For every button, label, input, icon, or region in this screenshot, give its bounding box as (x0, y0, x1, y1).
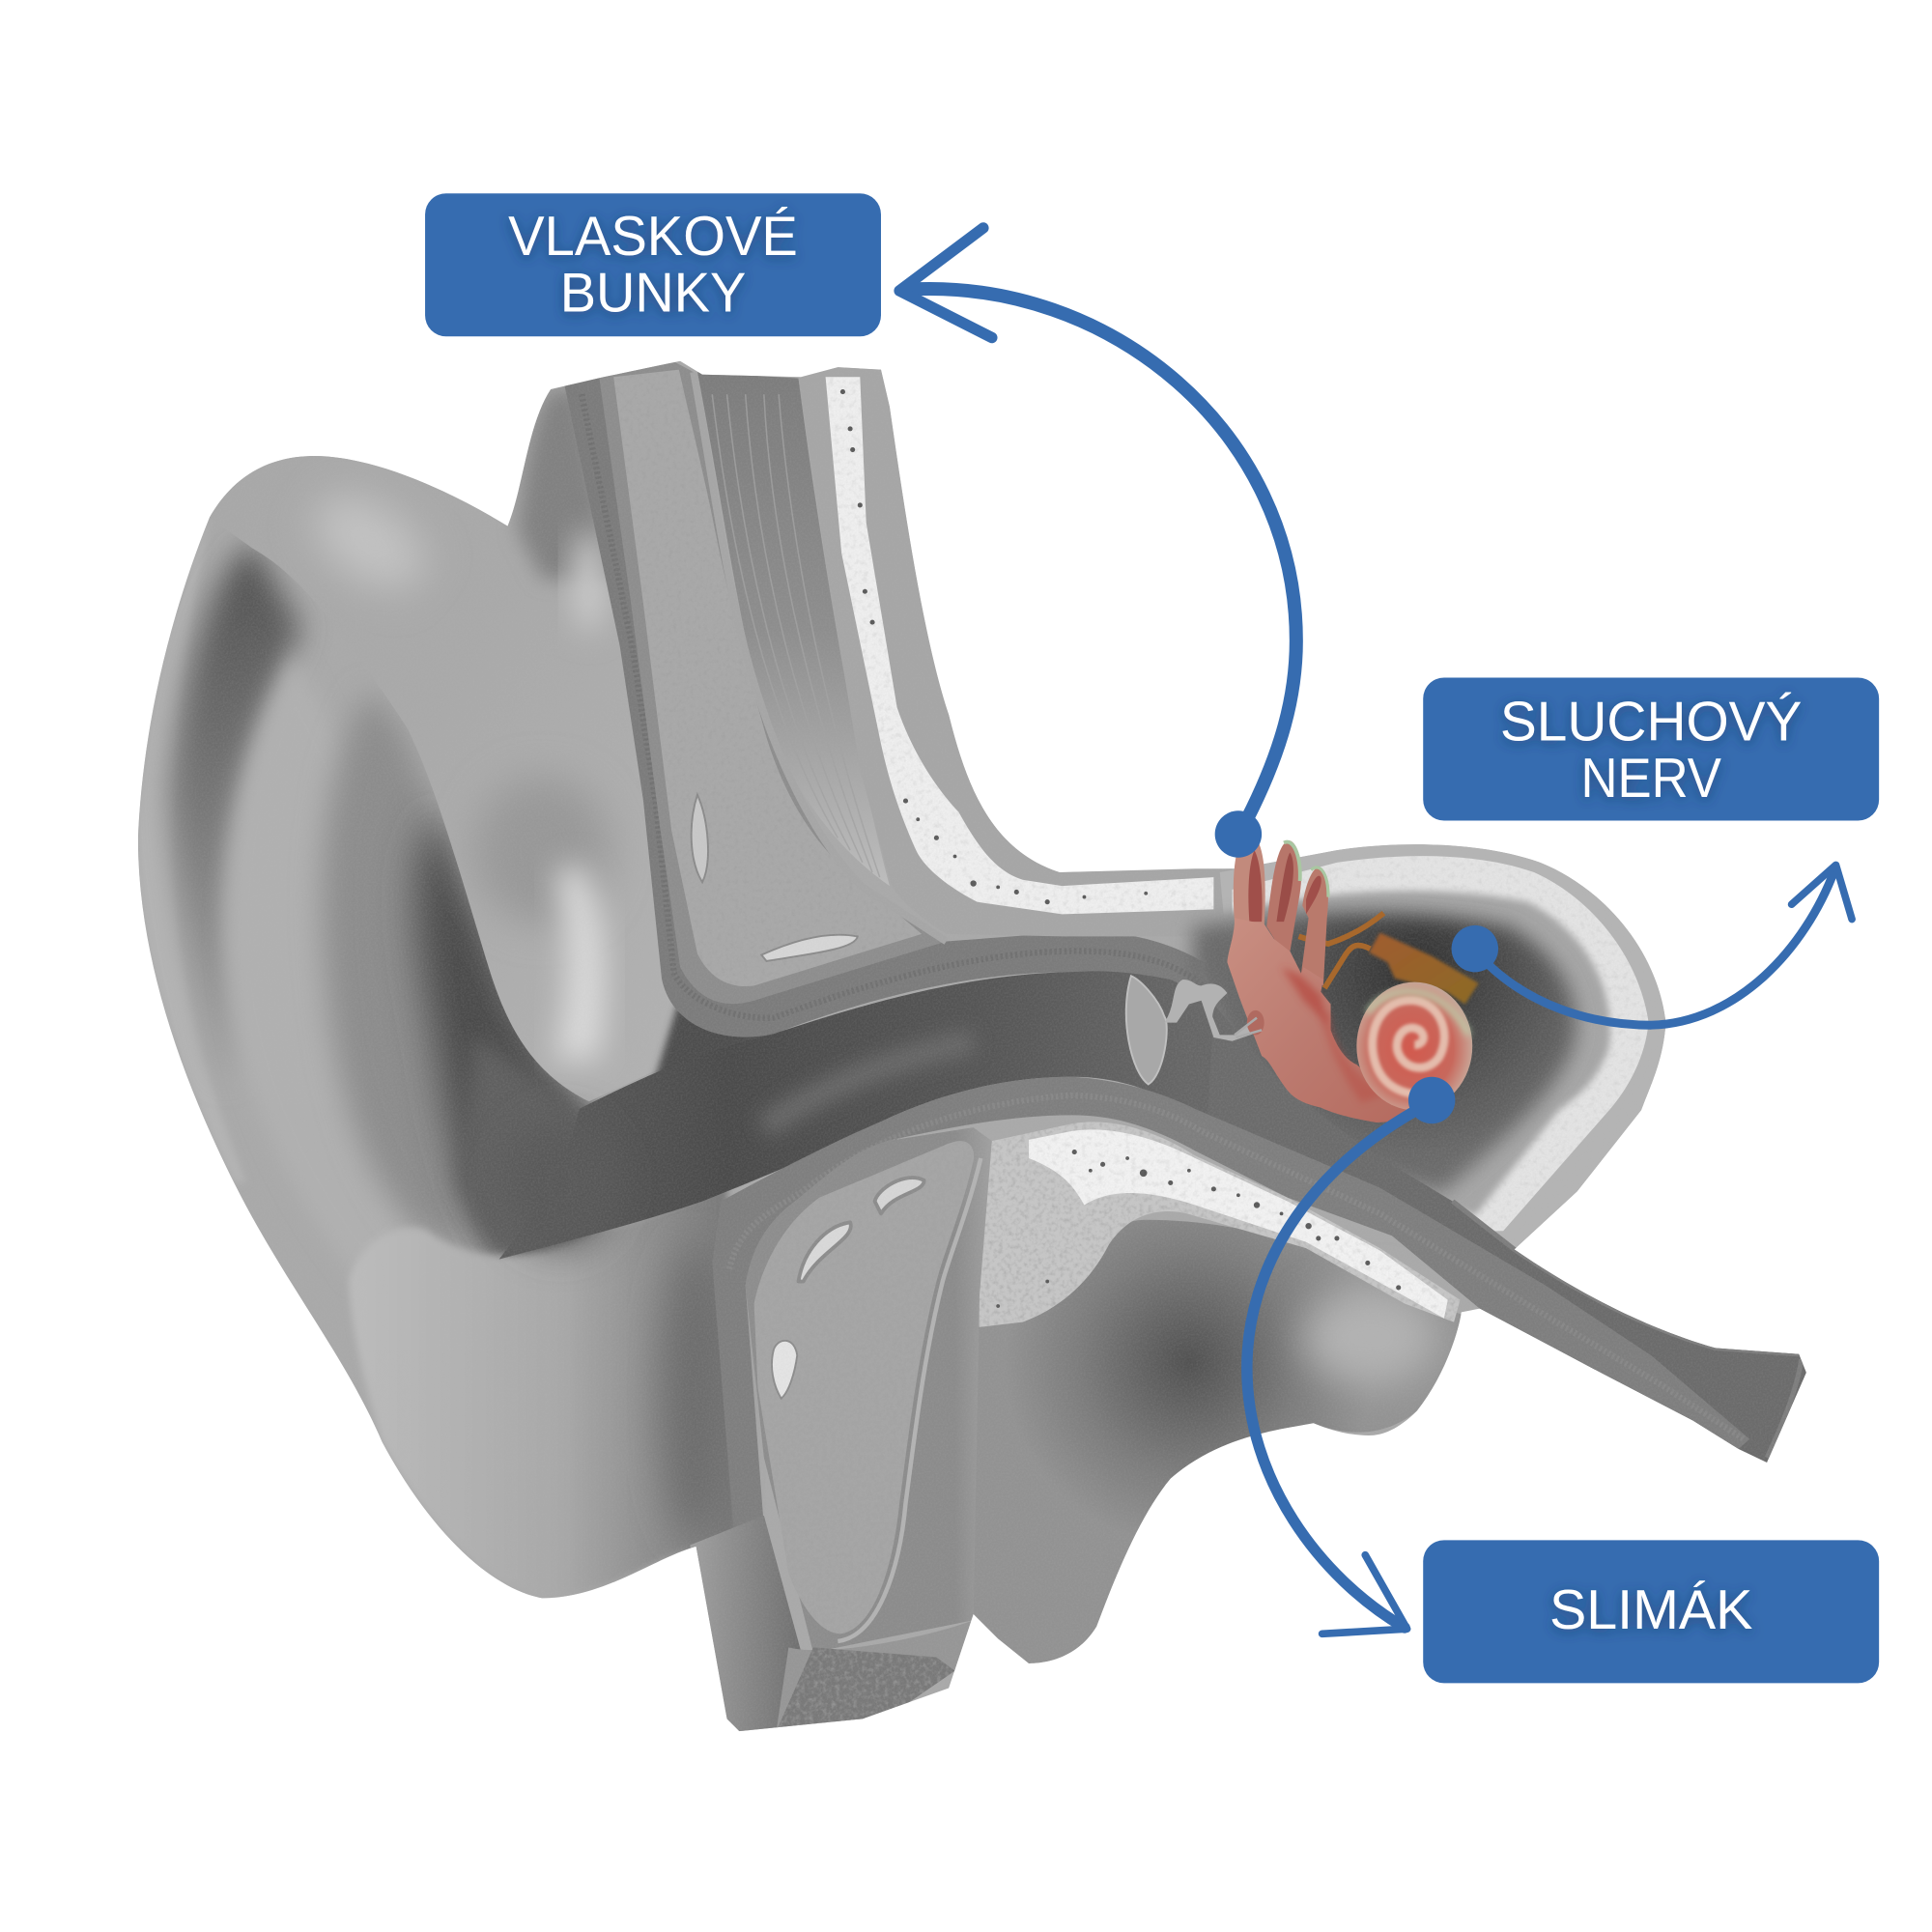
bone dots lower (996, 1150, 1401, 1308)
muscle fibers (712, 394, 880, 877)
muscle layer (697, 372, 890, 886)
cochlea (1356, 982, 1472, 1110)
label text: SLIMÁK (1549, 1579, 1752, 1641)
cochlea body (1356, 982, 1472, 1110)
lower block vessel 3 (772, 1341, 797, 1399)
body upper right shade (518, 389, 616, 579)
right skin band upper (799, 367, 1233, 936)
canal lumen highlight (764, 1041, 974, 1127)
dot: sluchový nerv (1452, 925, 1498, 972)
antihelix inner shade (311, 696, 490, 1252)
concha lower shadow (452, 1041, 589, 1256)
label text: BUNKY (560, 263, 746, 325)
lower wall band (712, 1077, 1749, 1647)
canal tail (1208, 1005, 1806, 1463)
label box (425, 193, 881, 336)
label box (1423, 678, 1879, 820)
right outer skin ring (1220, 844, 1665, 1249)
lower bone left gray (974, 1122, 1460, 1327)
helix highlight (311, 491, 428, 593)
arrow head (899, 228, 992, 337)
semicircular canal 3 inner (1306, 876, 1321, 914)
bone strip upper (826, 377, 1213, 914)
right bone ring (1233, 856, 1649, 1233)
arrow: sluchový nerv (1485, 865, 1852, 1025)
bottom band frame (777, 1620, 974, 1731)
dot: vlaskové bunky (1215, 810, 1262, 858)
label text (508, 206, 798, 325)
cochlea spiral (1373, 1001, 1444, 1094)
dot: slimák (1408, 1077, 1455, 1123)
lobe shade (662, 1244, 730, 1540)
semicircular canal 2 rim (1284, 842, 1300, 881)
oval window (1247, 1010, 1264, 1035)
nerve branches (1298, 913, 1383, 988)
upper block frame (599, 362, 947, 1004)
body highlight top (572, 529, 607, 634)
label text: VLASKOVÉ (508, 206, 798, 268)
arrow head (1322, 1555, 1407, 1634)
canal tail upper border (1453, 1202, 1799, 1354)
chamber dark interior (1193, 912, 1577, 1193)
antihelix ridge (218, 657, 305, 1068)
upper block vessel 2 (761, 935, 858, 961)
label: slimák (1423, 1540, 1879, 1683)
bottom cut block (777, 1647, 955, 1731)
body highlight low (554, 863, 605, 1060)
lower block frame (746, 1127, 992, 1652)
upper wall stitching (582, 394, 1226, 1018)
arrow shaft (1485, 870, 1834, 1025)
semicircular canal 3 rim (1311, 867, 1328, 897)
arrow head (1792, 865, 1852, 920)
arrow shaft (907, 289, 1296, 819)
canal upper corner shadow (653, 1005, 788, 1084)
stapes footplate (1235, 1018, 1262, 1037)
lower wall stitching (729, 1095, 1744, 1439)
upper wall band (564, 375, 1282, 1091)
semicircular canal 2 inner (1276, 853, 1293, 922)
label text: SLUCHOVÝ (1500, 692, 1802, 753)
duct red shade (1321, 1010, 1386, 1103)
ear cross-section illustration (124, 345, 1824, 1749)
arrow: vlaskové bunky (899, 228, 1296, 819)
lump right highlight (1302, 1288, 1438, 1386)
label: sluchový nerv (1423, 678, 1879, 820)
concha deep shadow (416, 813, 591, 1257)
label box (1423, 1540, 1879, 1683)
eardrum (1126, 976, 1167, 1084)
chamber light edge (1202, 891, 1610, 1216)
lower block vessel 2 (799, 1222, 851, 1282)
vestibule red shade (1282, 967, 1328, 1025)
canal tail end cap (1767, 1359, 1802, 1458)
upper block vessel 1 (692, 795, 708, 882)
surface grain (124, 345, 1824, 1749)
bottom flap (690, 1516, 801, 1734)
label text: NERV (1580, 748, 1722, 810)
cochlea green rim (1368, 992, 1468, 1035)
label: vlaskové bunky (425, 193, 881, 336)
ossicles and eardrum (1126, 976, 1264, 1084)
lower block vessel 1 (875, 1178, 924, 1213)
arrow shaft (1247, 1106, 1423, 1628)
semicircular canal 1 inner (1248, 850, 1263, 922)
lower block texture (754, 1141, 974, 1634)
label text (1500, 692, 1802, 810)
lump (974, 1220, 1472, 1663)
canal lumen (499, 971, 1369, 1260)
muscle separator (694, 372, 947, 941)
scapha shadow (170, 542, 301, 1079)
lower block inner rim (838, 1158, 980, 1641)
semicircular canal 3 (1301, 867, 1328, 985)
canal junction soft shadow (505, 1119, 616, 1247)
upper block texture (613, 370, 922, 986)
arrow: slimák (1247, 1106, 1423, 1634)
ear base silhouette (124, 345, 1824, 1749)
malleus and incus (1164, 980, 1264, 1041)
auditory nerve (1369, 933, 1479, 1005)
semicircular canal 1 (1234, 844, 1265, 926)
helix outer rim (141, 563, 241, 1179)
vestibule and cochlear duct (1227, 918, 1413, 1122)
lower bone white (1029, 1129, 1448, 1319)
bone dots upper (840, 389, 1148, 904)
tragus and upper body (210, 390, 620, 1101)
body mid shade (474, 777, 610, 924)
semicircular canal 2 (1266, 840, 1301, 952)
inner ear labyrinth (1227, 840, 1479, 1122)
lobe (349, 1182, 739, 1602)
